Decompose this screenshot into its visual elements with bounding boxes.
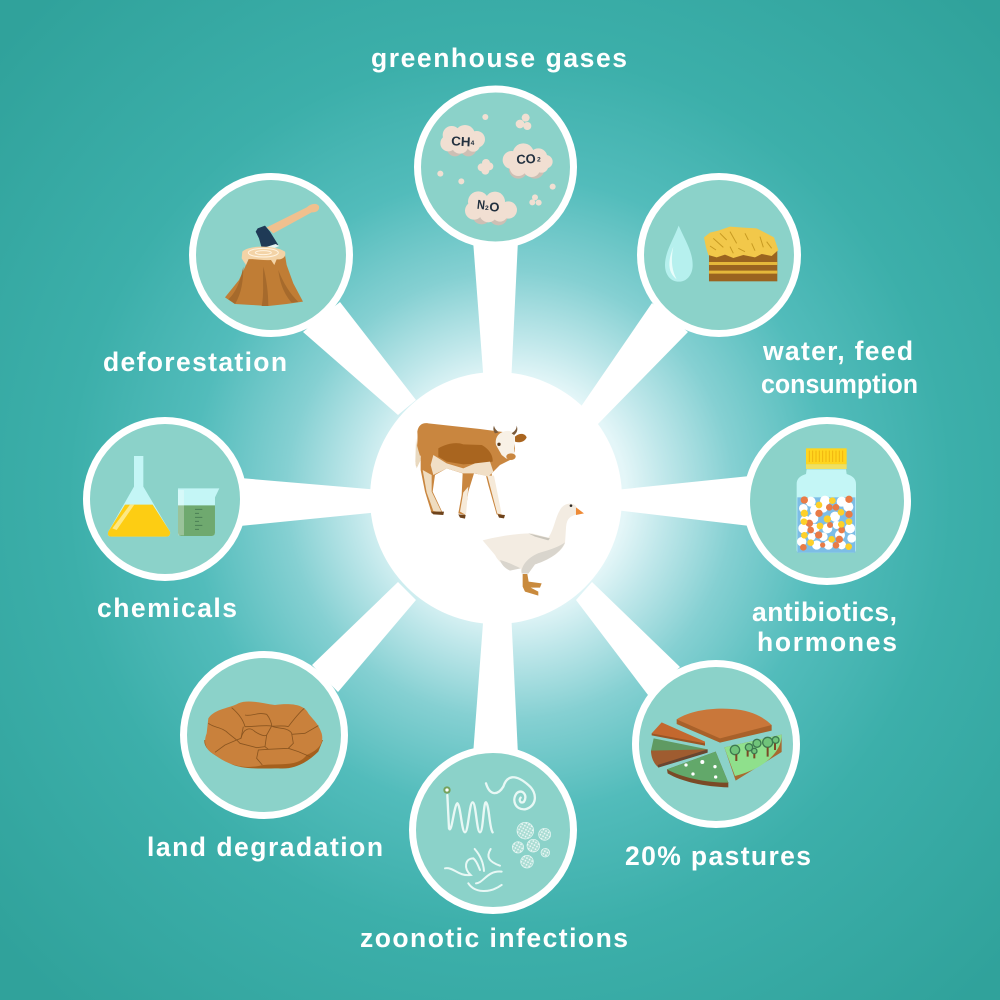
panel: greenhouse gases xyxy=(418,89,574,245)
label: N2O: N xyxy=(476,197,486,212)
heading: water, feed consumption: water, feed xyxy=(762,336,913,366)
icon: parasites xyxy=(443,777,551,891)
icon: pie chart of land xyxy=(651,709,782,787)
panel: water and feed xyxy=(640,176,798,334)
spokes xyxy=(240,240,750,755)
icon: hay bale xyxy=(704,227,778,281)
label: N2O letter O: O xyxy=(489,199,499,214)
panel: pastures xyxy=(636,664,796,824)
central circle xyxy=(370,372,622,624)
label: CH4: CH xyxy=(451,133,471,149)
icon: water drop xyxy=(665,226,693,282)
icon: cracked earth xyxy=(204,701,323,769)
icon: goose xyxy=(483,504,584,596)
label: CH4 subscript: 4 xyxy=(471,140,475,147)
icon: pill bottle xyxy=(797,448,856,553)
panel: land degradation xyxy=(184,654,344,816)
panel: zoonotic infections xyxy=(412,750,574,910)
panel: chemicals xyxy=(86,420,244,578)
heading: 20% pastures: 20% pastures xyxy=(625,841,811,871)
icon: axe in stump xyxy=(225,204,319,306)
icon: cow xyxy=(415,423,527,519)
heading: antibiotics, hormones: hormones xyxy=(757,627,897,657)
panel: deforestation xyxy=(192,176,350,334)
icon: flask xyxy=(108,456,170,537)
panel: antibiotics xyxy=(746,420,908,582)
heading: antibiotics, hormones xyxy=(752,597,897,657)
heading: greenhouse gases: greenhouse gases xyxy=(371,43,627,73)
heading: antibiotics, hormones: antibiotics, xyxy=(752,597,897,627)
heading: deforestation: deforestation xyxy=(103,347,287,377)
heading: zoonotic infections: zoonotic infections xyxy=(360,923,628,953)
heading: land degradation: land degradation xyxy=(147,832,383,862)
heading: water, feed consumption xyxy=(761,336,918,399)
heading: chemicals: chemicals xyxy=(97,593,237,623)
label: CO2 subscript: 2 xyxy=(537,157,541,164)
label: N2O subscript: 2 xyxy=(485,205,489,212)
heading: water, feed consumption: consumption xyxy=(761,369,918,399)
label: CO2: CO xyxy=(516,151,536,167)
icon: beaker xyxy=(178,488,219,536)
icon: gas clouds xyxy=(437,114,556,225)
